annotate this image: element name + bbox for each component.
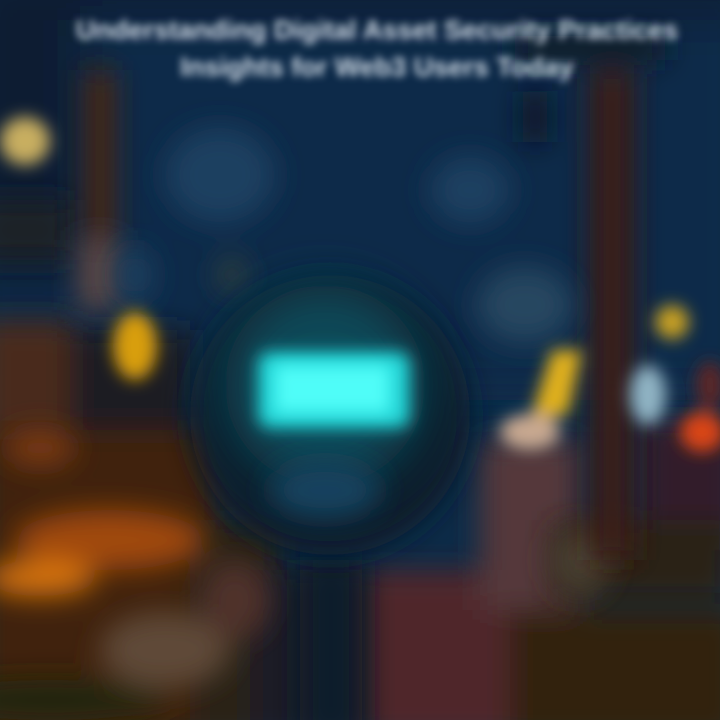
yellow lantern right	[500, 350, 582, 450]
title: Insights for Web3 Users Today	[180, 52, 574, 82]
title: Understanding Digital Asset Security Practices	[76, 15, 678, 45]
ground and left buildings	[0, 200, 720, 720]
faint cloud icons	[117, 127, 573, 343]
magnifying glass handle	[300, 560, 362, 720]
orange glowing path	[0, 430, 610, 720]
magnifying glass lens	[190, 275, 470, 555]
title	[71, 14, 682, 87]
right side lights	[630, 305, 720, 452]
night sky background	[0, 0, 720, 400]
lamp: moon-like glow left	[0, 117, 50, 165]
yellow lantern left	[113, 312, 157, 380]
wooden posts	[78, 35, 665, 560]
